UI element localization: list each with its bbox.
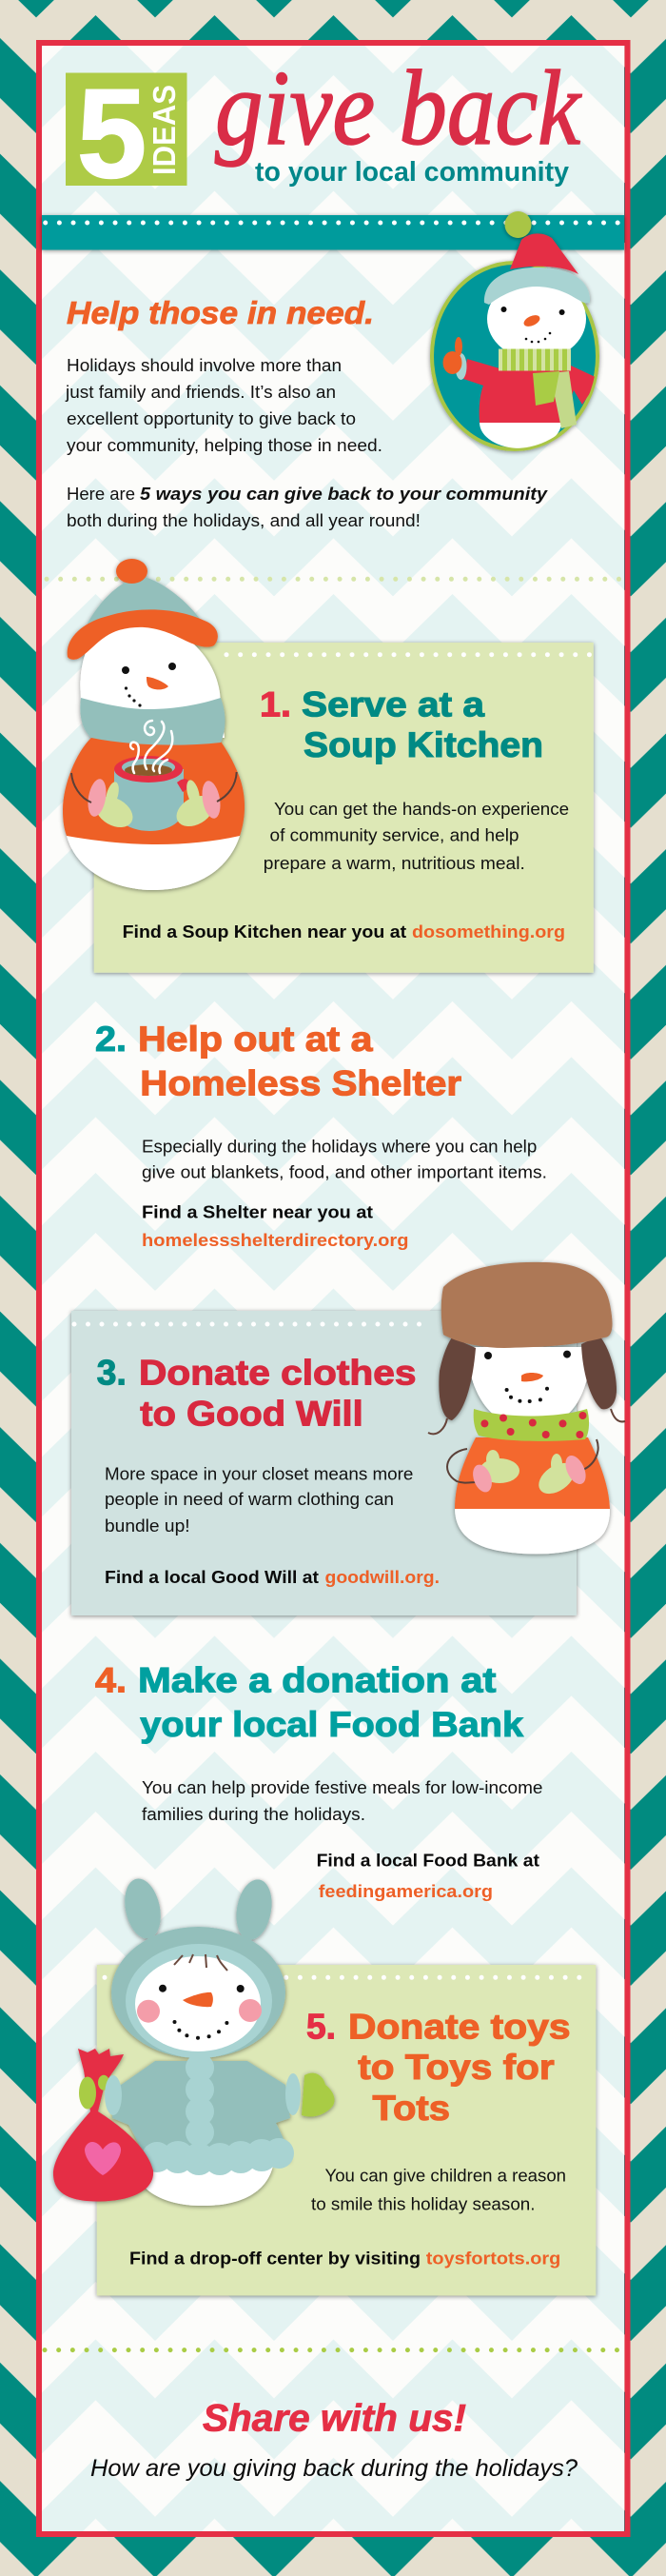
- badge: 5 ideas: 5: [77, 64, 147, 205]
- panel: idea 3 donate clothes: [71, 1311, 577, 1615]
- heading: 2 help out at a homeless shelter: 2.: [95, 1020, 127, 1059]
- divider: dotted green lower: [45, 2348, 622, 2352]
- heading: 2 help out at a homeless shelter: Homeless Shelter: [140, 1064, 461, 1103]
- text block: toys description: You can give children a reason: [325, 2167, 566, 2186]
- heading: share with us: Share with us!: [203, 2397, 466, 2439]
- text block: soup kitchen description: You can get the hands-on experience: [274, 800, 569, 819]
- heading: 1 serve at a soup kitchen: Soup Kitchen: [304, 725, 543, 764]
- text block: food bank description: families during the holidays.: [142, 1805, 365, 1824]
- text block: soup kitchen description: of community service, and help: [270, 825, 519, 844]
- text block: homeless shelter description: [142, 1137, 547, 1181]
- link line: feedingamerica.org: [317, 1852, 539, 1901]
- panel: idea 1 soup kitchen: [94, 643, 594, 973]
- text block: intro: Holidays should involve more than: [67, 356, 342, 375]
- heading: 2 help out at a homeless shelter: Help out at a: [138, 1020, 373, 1059]
- text block: food bank description: [142, 1778, 542, 1824]
- link line: toysfortots.org: toysfortots.org: [426, 2249, 560, 2269]
- heading: 4 make a donation at your local food bank: Make a donation at: [138, 1660, 496, 1699]
- heading: 4 make a donation at your local food bank: [95, 1660, 523, 1744]
- link line: toysfortots.org: Find a drop-off center by visiting: [129, 2249, 421, 2269]
- heading: 3 donate clothes to good will: to Good Will: [140, 1395, 363, 1434]
- icon: snowman with mug: [63, 559, 245, 890]
- text block: clothes description: people in need of warm clothing can: [105, 1490, 394, 1509]
- text block: closing question: How are you giving back during the holidays?: [90, 2455, 578, 2482]
- text block: intro: excellent opportunity to give back to: [67, 409, 356, 428]
- text block: intro: just family and friends. It’s also an: [65, 383, 336, 402]
- heading: 5 donate toys to toys for tots: 5.: [306, 2008, 336, 2047]
- icon: snowman with fur hat: [428, 1262, 625, 1555]
- heading: 5 donate toys to toys for tots: Donate toys: [348, 2008, 571, 2047]
- heading: 5 donate toys to toys for tots: Tots: [373, 2089, 450, 2128]
- link line: homeless shelter directory: homelessshelterdirectory.org: [142, 1231, 409, 1250]
- heading: 4 make a donation at your local food bank: your local Food Bank: [140, 1705, 523, 1744]
- link line: toysfortots.org: [129, 2249, 560, 2269]
- text block: clothes description: More space in your closet means more: [105, 1464, 413, 1483]
- text block: clothes description: [105, 1464, 413, 1536]
- heading: 2 help out at a homeless shelter: [95, 1020, 461, 1103]
- heading: 3 donate clothes to good will: 3.: [97, 1353, 127, 1392]
- badge: 5 ideas: IDEAS: [147, 85, 182, 175]
- icon: red gift bag with heart: [53, 2049, 153, 2202]
- link line: feedingamerica.org: Find a local Food Bank at: [317, 1852, 539, 1871]
- heading: 5 donate toys to toys for tots: to Toys for: [358, 2048, 555, 2087]
- icon: snowman in bunny suit with gift bag: [53, 1875, 335, 2206]
- link line: dosomething.org: [123, 922, 565, 941]
- link line: feedingamerica.org: feedingamerica.org: [319, 1882, 493, 1901]
- text block: toys description: [311, 2167, 566, 2214]
- title: give back: give back: [215, 50, 582, 168]
- panel: idea 5 donate toys: [97, 1965, 596, 2296]
- text block: homeless shelter description: give out blankets, food, and other important items.: [142, 1162, 547, 1181]
- text block: soup kitchen description: prepare a warm, nutritious meal.: [264, 854, 525, 873]
- text block: food bank description: You can help provide festive meals for low-income: [142, 1778, 542, 1797]
- title: give back: to your local community: [255, 157, 569, 188]
- heading: 3 donate clothes to good will: [97, 1353, 417, 1434]
- link line: goodwill.org: goodwill.org.: [325, 1568, 440, 1587]
- link line: dosomething.org: Find a Soup Kitchen near you at: [123, 922, 406, 941]
- divider: dotted green: [47, 577, 622, 582]
- text block: intro: [65, 356, 548, 530]
- icon: snowman medallion with thumbs up: [432, 211, 599, 449]
- text block: intro: Here are: [67, 485, 135, 504]
- heading: help those in need: Help those in need.: [67, 295, 374, 330]
- link line: homeless shelter directory: [142, 1203, 409, 1250]
- heading: 4 make a donation at your local food bank: 4.: [95, 1660, 127, 1699]
- link line: homeless shelter directory: Find a Shelter near you at: [142, 1203, 373, 1222]
- text block: intro: 5 ways you can give back to your community: [140, 485, 548, 504]
- link line: goodwill.org: Find a local Good Will at: [105, 1568, 319, 1587]
- banner: teal ribbon with dots: [42, 215, 624, 249]
- heading: 1 serve at a soup kitchen: Serve at a: [302, 685, 484, 724]
- text block: clothes description: bundle up!: [105, 1516, 190, 1536]
- text block: intro: both during the holidays, and all year round!: [67, 511, 421, 530]
- heading: 1 serve at a soup kitchen: 1.: [260, 685, 291, 724]
- badge: 5 ideas: [66, 64, 186, 205]
- heading: 5 donate toys to toys for tots: [306, 2008, 571, 2128]
- link line: dosomething.org: dosomething.org: [412, 922, 565, 941]
- link line: goodwill.org: [105, 1568, 440, 1587]
- text block: homeless shelter description: Especially during the holidays where you can help: [142, 1137, 537, 1156]
- text block: toys description: to smile this holiday season.: [311, 2195, 535, 2214]
- heading: 3 donate clothes to good will: Donate clothes: [139, 1353, 417, 1392]
- text block: intro: your community, helping those in need.: [67, 436, 382, 455]
- heading: 1 serve at a soup kitchen: [260, 685, 543, 764]
- text block: soup kitchen description: [264, 800, 569, 873]
